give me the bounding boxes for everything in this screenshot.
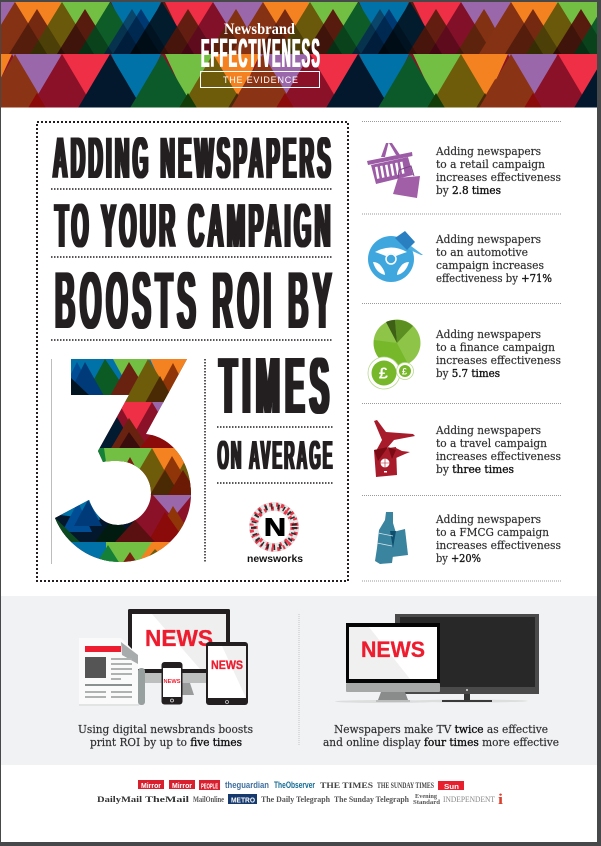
newspaper logos row 1: THE TIMES	[320, 781, 374, 790]
newspaper logos row 1	[138, 780, 464, 791]
FMCG text: increases effectiveness	[436, 539, 561, 552]
big number 3	[55, 359, 191, 562]
automotive text	[435, 233, 552, 285]
FMCG text: by +20%	[436, 552, 481, 565]
newspaper logos row 2: METRO	[231, 798, 256, 804]
retail text	[435, 145, 561, 197]
subtitle box: THE EVIDENCE	[223, 75, 298, 85]
caption: TV and online	[323, 723, 559, 749]
desktop monitor: NEWS	[145, 625, 213, 651]
newspaper	[79, 638, 145, 706]
newsworks logo	[247, 504, 303, 565]
travel text: by three times	[436, 463, 514, 476]
travel text	[435, 424, 561, 476]
bottom grey panel	[1, 596, 597, 765]
retail text: by 2.8 times	[436, 184, 501, 197]
phone	[162, 662, 182, 704]
newspaper logos row 2: The Daily Telegraph	[261, 795, 331, 804]
newspaper logos row 1: PEOPLE	[201, 784, 218, 790]
finance text	[435, 328, 561, 380]
television	[395, 614, 539, 702]
infographic page: ON AVERAGE	[218, 432, 334, 478]
caption: digital newsbrands: Using digital newsbrands boosts	[78, 723, 253, 736]
newspaper logos row 2: The Sunday Telegraph	[334, 795, 410, 804]
automotive text: campaign increases	[436, 259, 544, 272]
icon: shopping basket and bag	[367, 143, 420, 198]
finance text: increases effectiveness	[436, 354, 561, 367]
phone: NEWS	[164, 679, 181, 685]
newspaper logos row 2: TheMail	[145, 795, 190, 804]
FMCG text: to a FMCG campaign	[436, 526, 549, 539]
newspaper logos row 2: Standard	[413, 800, 441, 806]
retail item	[367, 143, 561, 198]
retail text: Adding newspapers	[435, 145, 541, 158]
icon: plane and passport	[374, 420, 415, 477]
right column dividers	[362, 122, 562, 581]
title: Newsbrand: Newsbrand	[224, 21, 295, 38]
automotive item	[368, 231, 552, 285]
desktop monitor: NEWS	[361, 637, 425, 662]
illustration: TV and desktop	[335, 614, 539, 703]
desktop monitor	[128, 609, 230, 695]
finance text: by 5.7 times	[436, 367, 500, 380]
newspaper logos row 2: MailOnline	[193, 795, 224, 804]
travel text: to a travel campaign	[436, 437, 547, 450]
FMCG item	[375, 512, 561, 565]
infographic page: TIMES	[220, 341, 334, 430]
icon: pie chart and coins: £	[379, 366, 388, 382]
newsworks logo: N	[264, 512, 286, 542]
newspaper logos row 1: Mirror	[172, 783, 192, 790]
newspaper logos row 2: Evening	[415, 794, 437, 800]
finance item	[368, 320, 561, 389]
desktop monitor	[335, 623, 440, 703]
newspaper logos row 2: i	[498, 792, 503, 808]
header banner: EFFECTIVENESS	[201, 30, 321, 76]
travel text: increases effectiveness	[436, 450, 561, 463]
travel text: Adding newspapers	[435, 424, 541, 437]
retail text: to a retail campaign	[436, 158, 545, 171]
FMCG text	[435, 513, 561, 565]
newsworks logo: newsworks	[247, 553, 303, 565]
newspaper logos row 1: Sun	[444, 784, 459, 791]
tablet	[206, 642, 248, 705]
subtitle box	[200, 72, 320, 88]
newspaper logos row 1: THE SUNDAY TIMES	[377, 781, 434, 790]
caption: digital newsbrands: print ROI by up to five times	[90, 736, 242, 749]
icon: pie chart and coins	[368, 320, 420, 389]
caption: digital newsbrands	[78, 723, 253, 749]
header banner	[0, 2, 601, 108]
FMCG text: Adding newspapers	[435, 513, 541, 526]
main headline panel	[37, 122, 348, 581]
icon: steering wheel and key	[368, 231, 423, 282]
tablet: NEWS	[211, 658, 243, 672]
caption: TV and online: Newspapers make TV twice as effective	[334, 723, 548, 736]
newspaper logos row 2: INDEPENDENT	[443, 795, 495, 804]
icon: bottle and can	[375, 512, 408, 564]
travel item	[374, 420, 561, 477]
newspaper logos row 2: DailyMail	[97, 795, 143, 804]
automotive text: Adding newspapers	[435, 233, 541, 246]
automotive text: to an automotive	[436, 246, 528, 259]
caption: TV and online: and online display four times more effective	[323, 736, 559, 749]
finance text: Adding newspapers	[435, 328, 541, 341]
finance text: to a finance campaign	[436, 341, 555, 354]
automotive text: effectiveness by +71%	[436, 272, 552, 285]
newspaper logos row 1: Mirror	[141, 783, 161, 790]
newspaper logos row 2	[97, 792, 503, 808]
icon: pie chart and coins: £	[402, 366, 407, 376]
newspaper logos row 1: TheObserver	[274, 780, 315, 790]
triangle pattern	[0, 2, 601, 108]
newspaper logos row 1: theguardian	[225, 780, 269, 790]
illustration: digital devices and newspaper	[79, 609, 248, 706]
retail text: increases effectiveness	[436, 171, 561, 184]
